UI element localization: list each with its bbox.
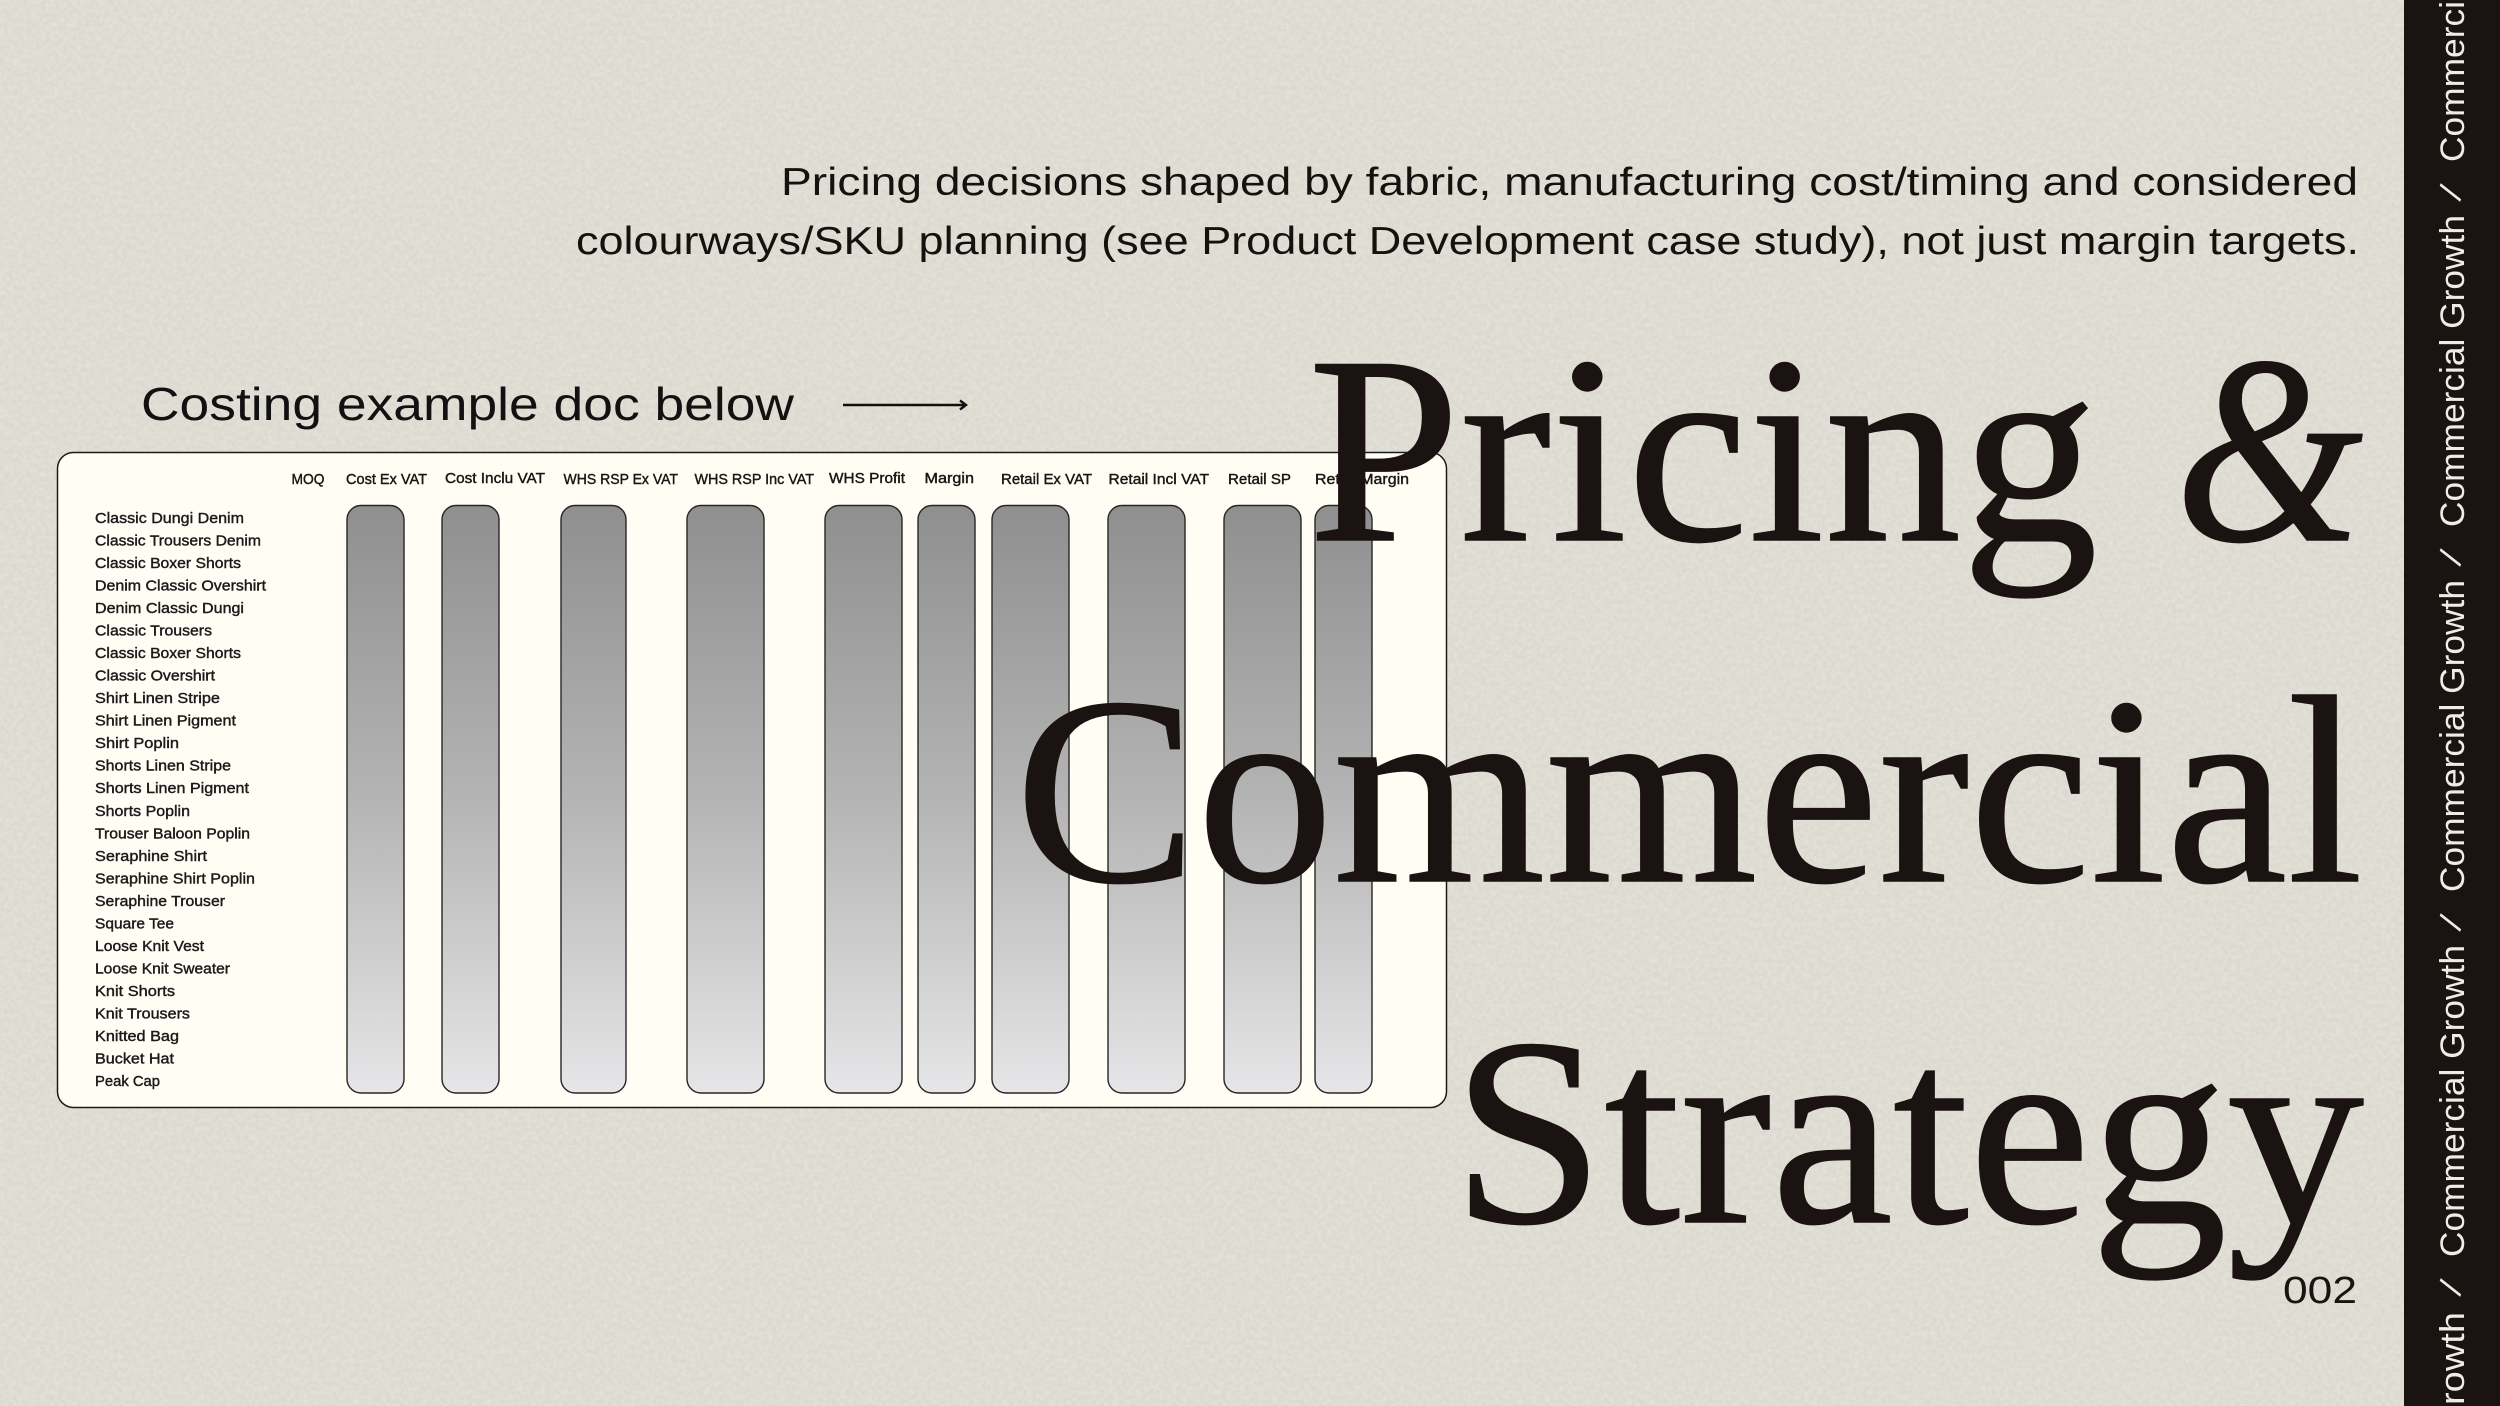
product name list: Seraphine Shirt Poplin (95, 871, 255, 887)
title (1015, 301, 2364, 1281)
arrow pointing right (843, 400, 966, 410)
product name list: Trouser Baloon Poplin (95, 826, 250, 842)
title: Pricing (1308, 301, 2098, 599)
table column headers: Cost Inclu VAT (445, 471, 545, 487)
product name list: Classic Boxer Shorts (95, 646, 241, 662)
product name list: Shirt Linen Stripe (95, 691, 220, 707)
side band: repeating vertical text: Commercial Growth (2434, 945, 2472, 1257)
table column headers: Retail Incl VAT (1108, 472, 1209, 488)
product name list: Shorts Linen Stripe (95, 759, 231, 775)
subtitle text block: colourways/SKU planning (see Product Development case study), not just margin targets. (576, 220, 2359, 263)
product name list: Classic Dungi Denim (95, 511, 244, 527)
product name list: Shirt Linen Pigment (95, 714, 236, 730)
product name list: Peak Cap (95, 1074, 160, 1090)
product name list: Denim Classic Overshirt (95, 579, 266, 595)
product name list: Classic Overshirt (95, 669, 215, 685)
table column headers: WHS RSP Ex VAT (564, 472, 678, 488)
table column headers: Retail Ex VAT (1001, 472, 1092, 488)
table column headers: Cost Ex VAT (346, 472, 427, 488)
product name list: Seraphine Shirt (95, 849, 207, 865)
side band: repeating vertical text: / (2432, 546, 2471, 570)
subtitle text block (576, 161, 2359, 263)
product name list: Square Tee (95, 916, 174, 932)
table column headers: Margin (924, 471, 974, 487)
table column headers (292, 471, 1409, 488)
product name list: Seraphine Trouser (95, 894, 225, 910)
panel background (58, 452, 1446, 1108)
product name list: Shirt Poplin (95, 736, 179, 752)
product name list: Loose Knit Sweater (95, 961, 230, 977)
product name list: Shorts Poplin (95, 804, 190, 820)
table column headers: Retail Margin (1315, 472, 1409, 488)
caption: costing example: Costing example doc below (141, 378, 795, 430)
side band: repeating vertical text: rowth (2434, 1312, 2472, 1405)
redacted value columns (347, 506, 1372, 1093)
table column headers: WHS Profit (829, 471, 905, 487)
title: Strategy (1452, 983, 2364, 1281)
product name list: Knit Trousers (95, 1006, 190, 1022)
side band: repeating vertical text: Commerci (2434, 1, 2472, 162)
page number: 002 (2283, 1270, 2357, 1312)
title: & (2175, 301, 2364, 598)
subtitle text block: Pricing decisions shaped by fabric, manufacturing cost/timing and considered (781, 161, 2358, 204)
product name list: Classic Boxer Shorts (95, 556, 241, 572)
side band: repeating vertical text: / (2432, 181, 2471, 205)
product name list: Classic Trousers Denim (95, 534, 261, 550)
side band: repeating vertical text: Commercial Growth (2434, 580, 2472, 892)
side band: repeating vertical text (2404, 0, 2500, 1406)
side band: repeating vertical text: Commercial Growth (2434, 215, 2472, 527)
product name list: Bucket Hat (95, 1052, 174, 1068)
product name list: Knit Shorts (95, 984, 175, 1000)
title: Commercial (1015, 642, 2363, 939)
table column headers: WHS RSP Inc VAT (694, 472, 814, 488)
side band: repeating vertical text: / (2432, 1276, 2471, 1300)
product name list: Loose Knit Vest (95, 939, 204, 955)
product name list: Knitted Bag (95, 1029, 179, 1045)
product name list: Classic Trousers (95, 624, 212, 640)
product name list: Denim Classic Dungi (95, 601, 244, 617)
product name list: Shorts Linen Pigment (95, 781, 249, 797)
table column headers: Retail SP (1228, 472, 1291, 488)
table column headers: MOQ (292, 472, 324, 488)
product name list (95, 511, 266, 1090)
panel: costing table (58, 452, 1446, 1108)
side band: repeating vertical text: / (2432, 911, 2471, 935)
